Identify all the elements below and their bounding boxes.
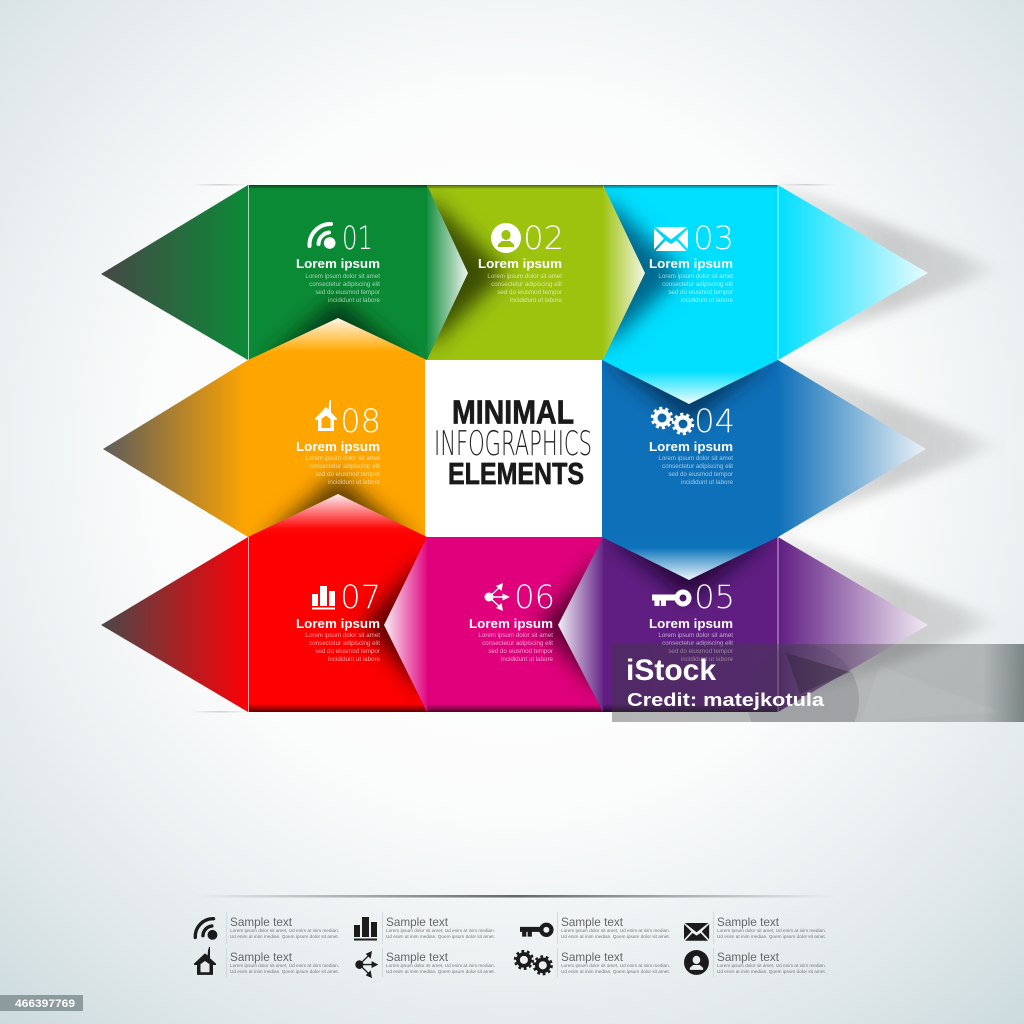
text 04: Lorem ipsum [649,439,733,454]
text 02: 02 [523,219,564,257]
icon: wifi [309,224,336,249]
legend item: share: Sample text [386,950,449,964]
watermark band [612,644,1024,722]
legend divider [195,895,835,898]
legend item: person: Sample text [717,950,780,964]
legend item: person [684,948,826,977]
legend item: wifi: Lorem ipsum dolor sit amet, Ud enim at inim median. [230,928,339,933]
text 08: 08 [340,402,381,440]
text 08: consectetur adipiscing elit [309,463,380,470]
title text [434,394,592,491]
text 07: Lorem ipsum dolor sit amet [305,632,380,639]
text 01 [296,219,381,304]
text 07: sed do eiusmod tempor [315,648,380,655]
arrow panels grid [101,185,928,712]
title text: INFOGRAPHICS [434,424,592,464]
text 01: sed do eiusmod tempor [315,289,380,296]
panel 02 olive [427,185,604,360]
text 06: 06 [514,578,555,616]
panel 04 blue [602,358,926,537]
panel 01 green [101,185,428,364]
text 04: Lorem ipsum dolor sit amet [658,455,733,462]
text 03: 03 [693,219,734,257]
text 03: sed do eiusmod tempor [668,289,733,296]
legend item: wifi: Sample text [230,915,293,929]
text 07: Lorem ipsum [296,616,380,631]
legend item: share [355,948,495,978]
text 05: 05 [694,578,735,616]
legend item: house [194,947,339,977]
icon: house [315,400,337,431]
text 07: consectetur adipiscing elit [309,640,380,647]
image id tag: 466397769 [15,998,75,1010]
text 03: Lorem ipsum [649,256,733,271]
text 07 [296,578,381,663]
text 06: consectetur adipiscing elit [482,640,553,647]
title text: ELEMENTS [448,456,584,491]
legend item: bars: Lorem ipsum dolor sit amet, Ud enim at inim median. [386,928,495,933]
fold chevrons [248,185,778,712]
text 07: incididunt ut labore [328,656,381,663]
legend item: gears [515,948,670,977]
legend item: wifi [195,912,339,944]
legend item: key: Ud enim at inim median. Qoem ipsum dolor sit amet. [561,934,670,939]
text 08 [296,400,381,486]
text 05: Lorem ipsum [649,616,733,631]
text 06: sed do eiusmod tempor [488,648,553,655]
text 02: consectetur adipiscing elit [491,281,562,288]
panel 03 cyan [603,185,928,360]
text 07: 07 [340,578,381,616]
legend item: share: Lorem ipsum dolor sit amet, Ud enim at inim median. [386,963,495,968]
legend item: envelope: Lorem ipsum dolor sit amet, Ud enim at inim median. [717,928,826,933]
text 06: Lorem ipsum dolor sit amet [478,632,553,639]
text 02: sed do eiusmod tempor [497,289,562,296]
text 08: sed do eiusmod tempor [315,471,380,478]
legend item: envelope [684,912,826,944]
text 02: Lorem ipsum dolor sit amet [487,273,562,280]
panel 07 red [101,537,428,712]
text 01: consectetur adipiscing elit [309,281,380,288]
legend item: person: Ud enim at inim median. Qoem ipsum dolor sit amet. [717,969,826,974]
text 03: incididunt ut labore [681,297,734,304]
text 03 [649,219,734,304]
text 01: Lorem ipsum [296,256,380,271]
top and bottom edge highlights [190,184,836,712]
text 02: incididunt ut labore [510,297,563,304]
legend item: envelope: Sample text [717,915,780,929]
panel 06 magenta [427,537,604,712]
text 04: sed do eiusmod tempor [668,471,733,478]
text 01: 01 [342,219,373,257]
text 06: incididunt ut labore [501,656,554,663]
panel 05 purple [603,535,928,712]
legend item: house: Lorem ipsum dolor sit amet, Ud enim at inim median. [230,963,339,968]
legend item: bars [354,912,495,944]
legend item: key: Lorem ipsum dolor sit amet, Ud enim at inim median. [561,928,670,933]
icon: key [652,592,689,606]
text 05: sed do eiusmod tempor [668,648,733,655]
legend item: bars: Ud enim at inim median. Qoem ipsum dolor sit amet. [386,934,495,939]
icon: gears [652,408,692,434]
cast shadows behind right arrows [782,183,1003,704]
text 04: incididunt ut labore [681,479,734,486]
legend item: key [520,912,670,944]
legend item: envelope: Ud enim at inim median. Qoem ipsum dolor sit amet. [717,934,826,939]
text 06 [469,578,555,663]
text 05: consectetur adipiscing elit [662,640,733,647]
text 03: Lorem ipsum dolor sit amet [658,273,733,280]
text 08: Lorem ipsum dolor sit amet [305,455,380,462]
text 05 [649,578,735,663]
watermark credit: Credit: matejkotula [627,690,825,710]
legend item: gears: Ud enim at inim median. Qoem ipsum dolor sit amet. [561,969,670,974]
text 04: consectetur adipiscing elit [662,463,733,470]
text 01: Lorem ipsum dolor sit amet [305,273,380,280]
text 06: Lorem ipsum [469,616,553,631]
panel 08 orange [103,360,426,541]
text 01: incididunt ut labore [328,297,381,304]
legend item: person: Lorem ipsum dolor sit amet, Ud enim at inim median. [717,963,826,968]
text 03: consectetur adipiscing elit [662,281,733,288]
icon: bars [312,586,335,610]
image id tag [0,995,83,1011]
text 05: incididunt ut labore [681,656,734,663]
icon: share [484,583,510,611]
title text: MINIMAL [452,394,574,430]
legend item: key: Sample text [561,915,624,929]
text 05: Lorem ipsum dolor sit amet [658,632,733,639]
legend item: gears: Lorem ipsum dolor sit amet, Ud enim at inim median. [561,963,670,968]
text 02 [478,219,564,304]
legend item: house: Sample text [230,950,293,964]
text 08: incididunt ut labore [328,479,381,486]
text 02: Lorem ipsum [478,256,562,271]
icon: envelope [654,227,688,251]
fold lines [248,185,778,712]
legend item: wifi: Ud enim at inim median. Qoem ipsum dolor sit amet. [230,934,339,939]
legend item: share: Ud enim at inim median. Qoem ipsum dolor sit amet. [386,969,495,974]
legend item: gears: Sample text [561,950,624,964]
text 04 [649,402,735,486]
legend item: bars: Sample text [386,915,449,929]
icon: person [491,223,521,253]
watermark logo: iStock [626,654,716,687]
title panel [425,360,602,537]
text 04: 04 [694,402,735,440]
text 08: Lorem ipsum [296,439,380,454]
legend [194,912,826,978]
legend item: house: Ud enim at inim median. Qoem ipsum dolor sit amet. [230,969,339,974]
